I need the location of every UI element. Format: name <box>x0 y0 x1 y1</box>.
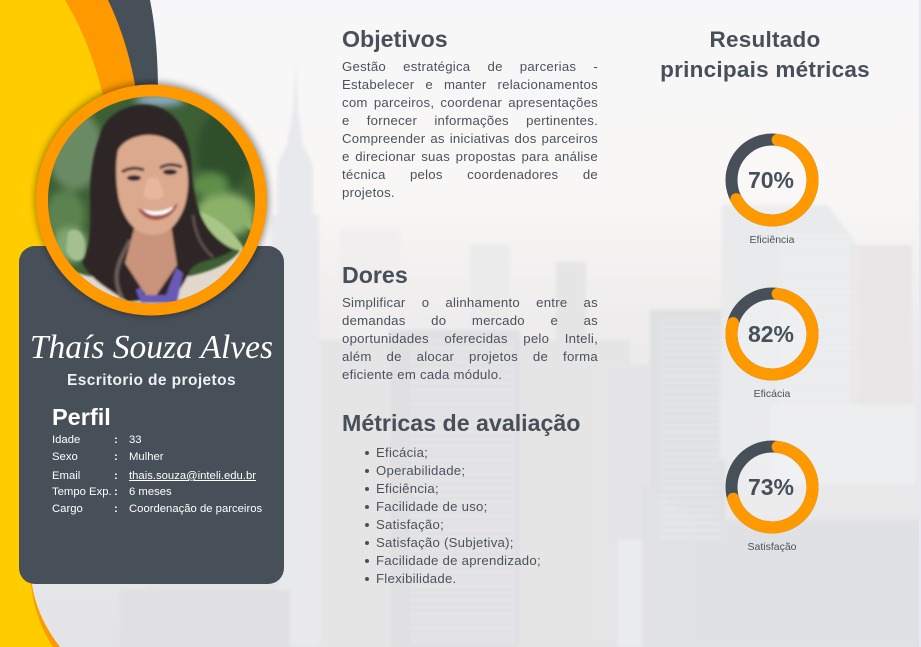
profile fields: : <box>114 503 118 515</box>
text: dores: eficiente em cada módulo. <box>342 367 502 382</box>
heading: dores: Dores <box>342 262 408 288</box>
profile fields: Tempo Exp. <box>52 486 112 498</box>
list: metricas: Facilidade de uso; <box>376 499 488 514</box>
text: objetivos: e direcionar suas propostas para análise <box>342 149 598 164</box>
list: metricas: Satisfação (Subjetiva); <box>376 535 514 550</box>
label: satisfacao: Satisfação <box>747 541 797 553</box>
heading: resultado <box>660 27 870 82</box>
profile fields: Email <box>52 470 80 482</box>
profile fields: Mulher <box>129 451 164 463</box>
portrait photo <box>30 78 274 318</box>
heading: resultado: Resultado <box>709 27 820 52</box>
list: metricas: Facilidade de aprendizado; <box>376 553 541 568</box>
list: metricas: Eficiência; <box>376 481 439 496</box>
donut: satisfacao 73% <box>726 440 818 534</box>
subtitle: Escritorio de projetos <box>67 372 236 389</box>
profile fields: 6 meses <box>129 486 172 498</box>
text: objetivos: Estabelecer e manter relacionamentos <box>342 77 598 92</box>
text: dores: além de alocar projetos de forma <box>342 349 598 364</box>
text: objetivos <box>342 59 598 200</box>
text: objetivos: com parceiros, coordenar apresentações <box>342 95 598 110</box>
profile fields: thais.souza@inteli.edu.br <box>129 470 256 482</box>
list: metricas: Satisfação; <box>376 517 444 532</box>
label: eficiencia: Eficiência <box>750 234 794 246</box>
text: objetivos: técnica pelos coordenadores de <box>342 167 598 182</box>
left decorative arcs <box>0 0 158 647</box>
panel: profile card <box>19 246 284 584</box>
text: objetivos: projetos. <box>342 185 395 200</box>
text: dores: demandas do mercado e as <box>342 313 598 328</box>
text: objetivos: Compreender as iniciativas dos parceiros <box>342 131 598 146</box>
profile fields: 33 <box>129 434 142 446</box>
profile fields: Sexo <box>52 451 78 463</box>
profile fields: : <box>114 434 118 446</box>
list: metricas: Flexibilidade. <box>376 571 456 586</box>
list: metricas: Operabilidade; <box>376 463 465 478</box>
text: objetivos: Gestão estratégica de parcerias - <box>342 59 598 74</box>
heading: metricas: Métricas de avaliação <box>342 410 580 436</box>
heading: objetivos: Objetivos <box>342 26 448 52</box>
donut: eficiencia 70% <box>726 134 818 226</box>
list: metricas <box>365 445 541 586</box>
label: eficacia: Eficácia <box>754 388 790 400</box>
donut: eficacia 82% <box>726 288 818 380</box>
donut: eficacia 82%: 82% <box>748 321 794 347</box>
profile fields: : <box>114 486 118 498</box>
donut: eficiencia 70%: 70% <box>748 167 794 193</box>
text: dores: oportunidades oferecidas pelo Inteli, <box>342 331 598 346</box>
profile fields: : <box>114 470 118 482</box>
text: objetivos: e fornecer informações pertinentes. <box>342 113 598 128</box>
profile fields: Coordenação de parceiros <box>129 503 262 515</box>
donut: satisfacao 73%: 73% <box>748 474 794 500</box>
profile fields: : <box>114 451 118 463</box>
text: dores <box>342 295 598 382</box>
name signature: Thaís Souza Alves <box>30 329 273 366</box>
profile fields <box>52 434 262 515</box>
list: metricas: Eficácia; <box>376 445 428 460</box>
profile fields: Idade <box>52 434 80 446</box>
text: dores: Simplificar o alinhamento entre as <box>342 295 598 310</box>
profile fields: Cargo <box>52 503 83 515</box>
heading: resultado: principais métricas <box>660 57 870 82</box>
heading: perfil: Perfil <box>52 404 111 430</box>
